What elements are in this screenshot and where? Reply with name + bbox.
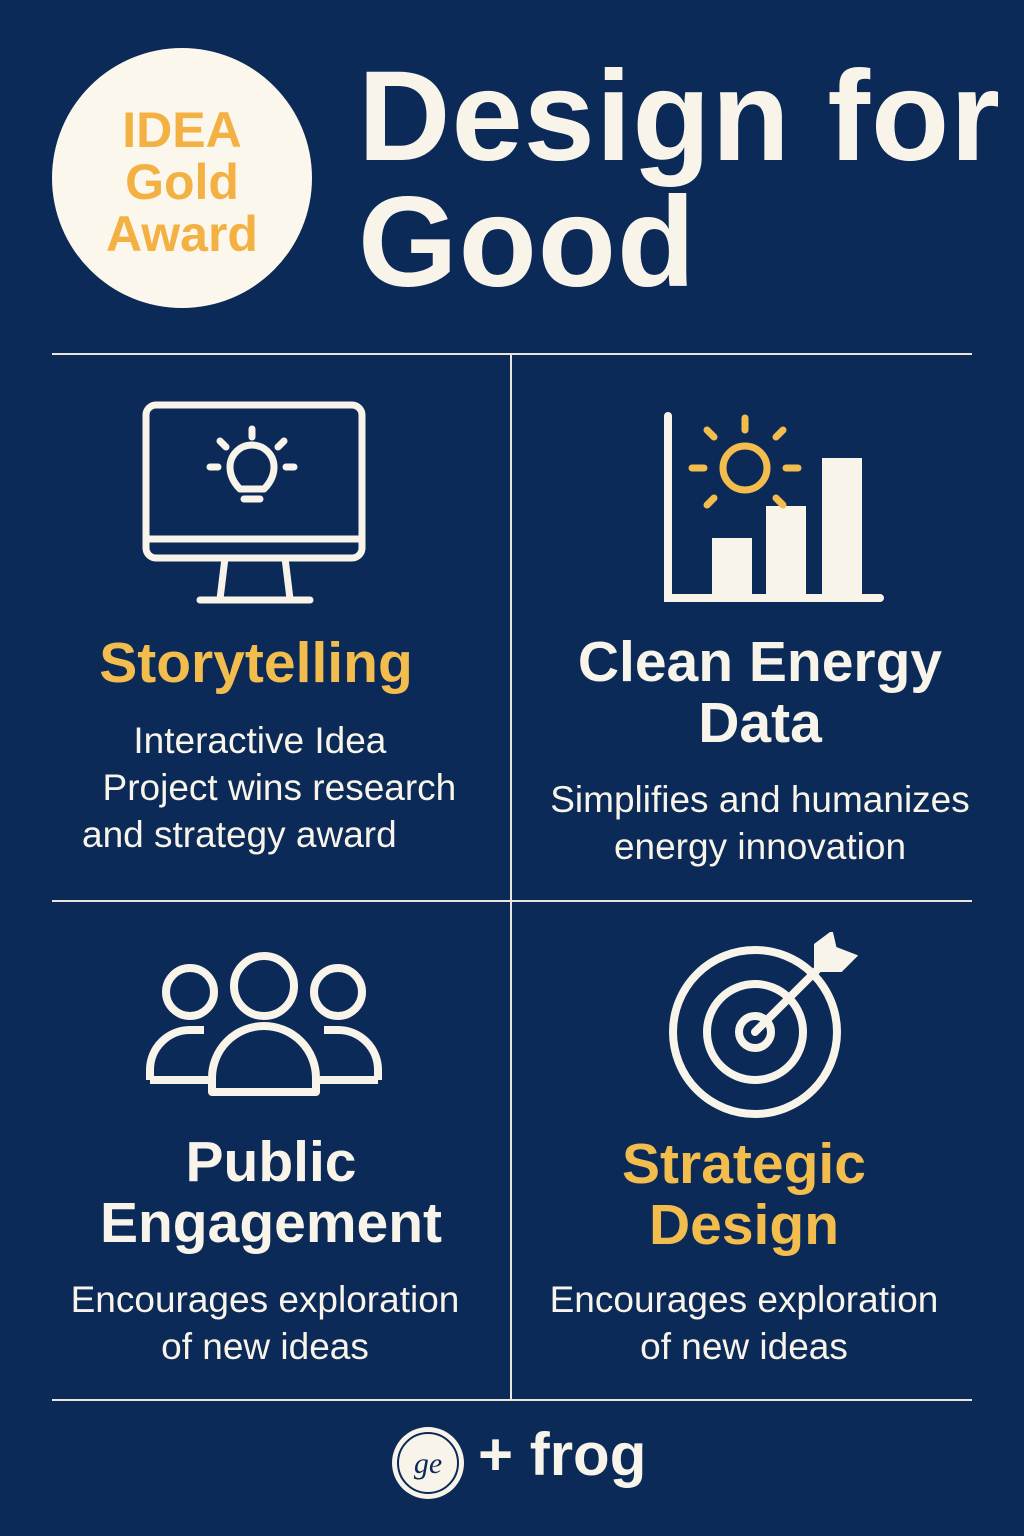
text: clean energy body: energy innovation xyxy=(614,826,906,867)
panel: strategic design xyxy=(550,932,938,1367)
panel: public engagement xyxy=(71,952,459,1367)
heading: Clean Energy Data: Data xyxy=(698,691,822,755)
heading: Public Engagement: Engagement xyxy=(100,1191,442,1255)
text: public engagement body xyxy=(71,1279,459,1367)
title: Good xyxy=(358,171,696,314)
badge: IDEA Gold Award: Award xyxy=(106,206,258,262)
text: strategic design body: Encourages exploration xyxy=(550,1279,938,1320)
text: clean energy body xyxy=(550,779,970,867)
icon: GE monogram xyxy=(392,1427,464,1499)
heading: Public Engagement xyxy=(100,1130,442,1255)
icon: target with arrow xyxy=(669,932,858,1118)
text: clean energy body: Simplifies and humanizes xyxy=(550,779,970,820)
logo: GE + frog xyxy=(392,1421,646,1499)
panel: clean energy data xyxy=(550,412,970,867)
title: Design for xyxy=(358,45,1001,188)
heading: Clean Energy Data xyxy=(578,630,942,755)
badge: IDEA Gold Award xyxy=(52,48,312,308)
text: storytelling body: and strategy award xyxy=(82,814,397,855)
text: strategic design body xyxy=(550,1279,938,1367)
text: public engagement body: of new ideas xyxy=(161,1326,369,1367)
heading: Strategic Design: Strategic xyxy=(622,1132,866,1196)
icon: GE monogram: ge xyxy=(414,1447,442,1480)
logo: GE + frog: + frog xyxy=(478,1421,646,1488)
badge: IDEA Gold Award: IDEA xyxy=(122,102,242,158)
icon: bar chart with sun xyxy=(664,412,884,602)
heading: Storytelling: Storytelling xyxy=(99,631,413,695)
title xyxy=(358,45,1001,314)
text: storytelling body xyxy=(82,720,456,855)
heading: Public Engagement: Public xyxy=(185,1130,357,1194)
heading: Strategic Design: Design xyxy=(649,1193,839,1257)
text: storytelling body: Project wins research xyxy=(103,767,456,808)
text: strategic design body: of new ideas xyxy=(640,1326,848,1367)
panel: storytelling xyxy=(82,402,456,855)
icon: monitor with lightbulb xyxy=(142,402,366,604)
heading: Strategic Design xyxy=(622,1132,866,1257)
heading: Clean Energy Data: Clean Energy xyxy=(578,630,942,694)
text: public engagement body: Encourages exploration xyxy=(71,1279,459,1320)
icon: people group xyxy=(146,952,382,1096)
badge: IDEA Gold Award: Gold xyxy=(125,154,239,210)
text: storytelling body: Interactive Idea xyxy=(133,720,386,761)
